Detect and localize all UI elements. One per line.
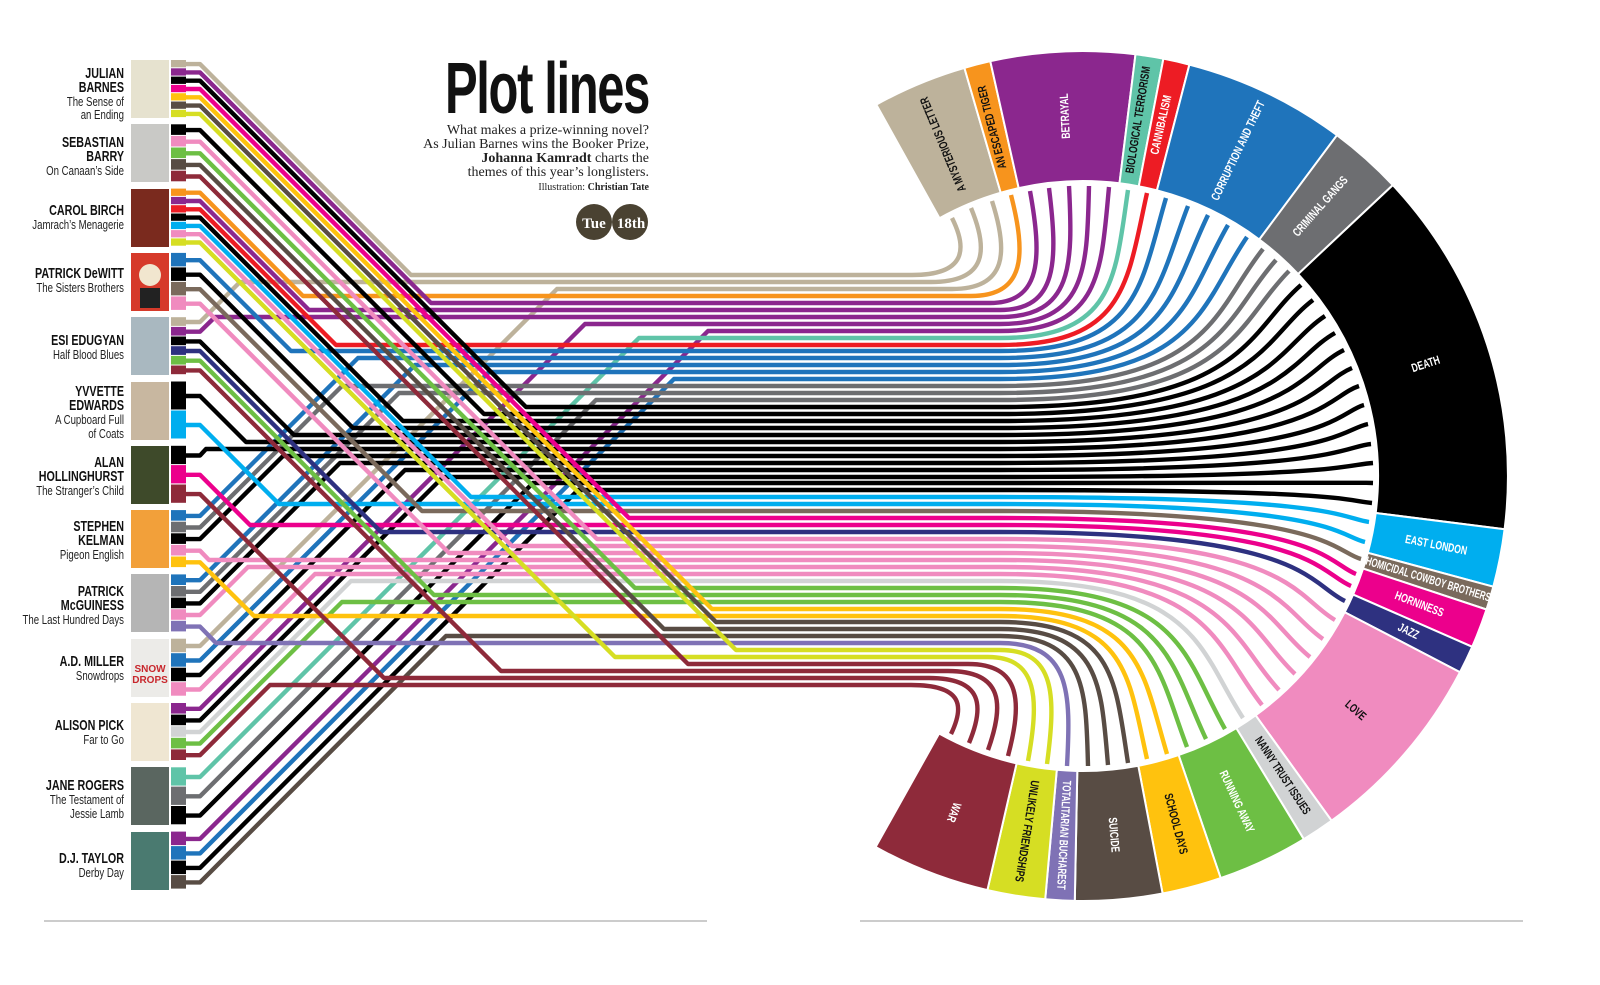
author: carol birch [32, 201, 124, 232]
lines: corruption and theft [186, 198, 1247, 853]
stubs: esi edugyan [171, 317, 186, 374]
sector: school days: SCHOOL DAYS [1161, 792, 1189, 856]
sector: an escaped tiger [964, 61, 1019, 193]
sector: biological terrorism: BIOLOGICAL TERRORISM [1124, 66, 1154, 174]
sector: nanny trust issues [1236, 715, 1332, 839]
stubs: patrick dewitt [171, 253, 186, 310]
sector: running away: RUNNING AWAY [1216, 769, 1256, 835]
stubs: a.d. miller [171, 639, 186, 696]
author: d.j. taylor: D.J. TAYLOR [59, 849, 124, 866]
author: sebastian barry [46, 133, 124, 178]
sector: cannibalism [1139, 59, 1189, 190]
date badge [576, 204, 648, 240]
author: d.j. taylor: Derby Day [79, 867, 124, 880]
author: yvvette edwards: of Coats [88, 428, 124, 441]
author: sebastian barry: SEBASTIAN [62, 133, 124, 150]
sector: betrayal: BETRAYAL [1059, 93, 1073, 139]
stubs: sebastian barry [171, 124, 186, 181]
subtitle: Illustration: Christian Tate [538, 182, 650, 193]
lines: death [186, 81, 1373, 868]
lines: homicidal cowboy brothers [186, 289, 1361, 559]
author: alison pick [55, 716, 125, 747]
title: Plot lines [445, 49, 649, 129]
author: patrick dewitt [35, 264, 124, 295]
stubs: jane rogers [171, 767, 186, 824]
author: esi edugyan [51, 331, 124, 362]
author: yvvette edwards: EDWARDS [69, 396, 124, 413]
author: julian barnes: BARNES [79, 78, 124, 95]
sector: death: DEATH [1410, 355, 1442, 375]
sector: suicide [1075, 766, 1163, 901]
author: a.d. miller: A.D. MILLER [60, 652, 124, 669]
lines: love [186, 142, 1335, 705]
lines: criminal gangs [186, 249, 1289, 796]
sector: betrayal [990, 51, 1136, 188]
lines: a mysterious letter [186, 64, 1001, 646]
lines: nanny trust issues [186, 581, 1243, 732]
author: jane rogers: Jessie Lamb [70, 808, 124, 821]
sector: cannibalism: CANNIBALISM [1149, 94, 1175, 156]
sector: totalitarian bucharest: TOTALITARIAN BUCHAREST [1054, 780, 1072, 890]
stubs: stephen kelman [171, 510, 186, 567]
author: stephen kelman: Pigeon English [60, 549, 124, 562]
subtitle: themes of this year’s longlisters. [468, 165, 649, 180]
sector: death [1298, 185, 1508, 529]
sector: running away [1179, 728, 1304, 878]
sector: a mysterious letter: A MYSTERIOUS LETTER [919, 94, 969, 193]
author: stephen kelman: KELMAN [78, 531, 124, 548]
sector: school days [1138, 755, 1221, 894]
sector: unlikely friendships: UNLIKELY FRIENDSHIPS [1012, 779, 1040, 883]
stubs: julian barnes [171, 60, 186, 117]
sector: east london: EAST LONDON [1404, 534, 1468, 558]
author: jane rogers: JANE ROGERS [46, 776, 124, 793]
subtitle: Johanna Kamradt charts the [481, 151, 649, 166]
author: julian barnes: an Ending [81, 109, 124, 122]
author: sebastian barry: On Canaan’s Side [46, 165, 124, 178]
author: yvvette edwards: YVVETTE [75, 382, 124, 399]
author: patrick mcguiness [23, 582, 125, 627]
author: julian barnes: The Sense of [67, 96, 125, 109]
lines: jazz [186, 351, 1345, 601]
sector: east london [1368, 513, 1505, 587]
stubs: patrick mcguiness [171, 574, 186, 631]
author: patrick mcguiness: The Last Hundred Days [23, 614, 124, 627]
sector: love: LOVE [1342, 699, 1368, 723]
author: esi edugyan: ESI EDUGYAN [51, 331, 124, 348]
book covers: SNOW [134, 664, 166, 675]
date badge: 18th [617, 216, 646, 232]
author: julian barnes: JULIAN [85, 64, 124, 81]
author: jane rogers [46, 776, 125, 821]
book covers [131, 60, 169, 890]
author: stephen kelman [60, 517, 124, 562]
author: patrick dewitt: PATRICK DeWITT [35, 264, 124, 281]
sector: war: WAR [943, 800, 963, 824]
author: stephen kelman: STEPHEN [73, 517, 124, 534]
lines: totalitarian bucharest [186, 627, 1068, 766]
author: yvvette edwards: A Cupboard Full [55, 414, 124, 427]
lines: suicide [186, 106, 1128, 882]
subtitle: What makes a prize-winning novel? [447, 123, 649, 138]
subtitle [423, 123, 650, 193]
author: carol birch: Jamrach’s Menagerie [32, 219, 124, 232]
sector: criminal gangs: CRIMINAL GANGS [1291, 174, 1351, 240]
sector: homicidal cowboy brothers: HOMICIDAL COWBOY BROTHERS [1364, 555, 1492, 605]
author: carol birch: CAROL BIRCH [49, 201, 124, 218]
sector: a mysterious letter [876, 68, 1001, 218]
author: a.d. miller [60, 652, 124, 683]
sector: horniness [1353, 569, 1486, 647]
theme arc [876, 51, 1508, 901]
author: jane rogers: The Testament of [50, 794, 125, 807]
sector: criminal gangs [1259, 135, 1393, 274]
sector: jazz: JAZZ [1396, 622, 1421, 643]
author: julian barnes [67, 64, 125, 122]
book covers: DROPS [132, 675, 168, 686]
author: patrick dewitt: The Sisters Brothers [36, 282, 124, 295]
stubs: alison pick [171, 703, 186, 760]
plot lines [186, 64, 1373, 882]
lines: betrayal [186, 72, 1109, 839]
sector: biological terrorism [1120, 54, 1163, 186]
sector: an escaped tiger: AN ESCAPED TIGER [976, 84, 1010, 170]
sector: horniness: HORNINESS [1393, 590, 1445, 620]
author: a.d. miller: Snowdrops [76, 670, 124, 683]
author: alan hollinghurst: HOLLINGHURST [39, 467, 124, 484]
author: sebastian barry: BARRY [86, 147, 124, 164]
lines: biological terrorism [186, 190, 1128, 777]
author: alan hollinghurst [36, 453, 124, 498]
lines: running away [186, 153, 1225, 747]
author labels [23, 64, 125, 880]
sector: suicide: SUICIDE [1105, 817, 1121, 853]
author: esi edugyan: Half Blood Blues [53, 349, 124, 362]
sector: corruption and theft: CORRUPTION AND THEFT [1210, 99, 1268, 203]
lines: horniness [186, 89, 1356, 586]
lines: school days [186, 97, 1167, 759]
theme stubs [171, 60, 186, 889]
stubs: yvvette edwards [171, 382, 186, 438]
author: alison pick: ALISON PICK [55, 716, 125, 733]
sector: totalitarian bucharest [1045, 770, 1077, 901]
subtitle: As Julian Barnes wins the Booker Prize, [423, 137, 649, 152]
author: alan hollinghurst: ALAN [94, 453, 124, 470]
author: yvvette edwards [55, 382, 124, 441]
stubs: alan hollinghurst [171, 446, 186, 503]
author: patrick mcguiness: PATRICK [78, 582, 125, 599]
lines: cannibalism [186, 193, 1147, 345]
author: alison pick: Far to Go [83, 734, 124, 747]
author: alan hollinghurst: The Stranger’s Child [36, 485, 124, 498]
stubs: d.j. taylor [171, 832, 186, 889]
author: patrick mcguiness: McGUINESS [61, 596, 124, 613]
lines: war [186, 176, 1016, 756]
sector: war [876, 734, 1017, 890]
lines: east london [186, 226, 1369, 542]
sector: nanny trust issues: NANNY TRUST ISSUES [1252, 735, 1312, 817]
lines: an escaped tiger [186, 193, 1020, 296]
sector: jazz [1345, 595, 1472, 672]
sector: unlikely friendships [987, 763, 1057, 899]
sector: love [1256, 612, 1460, 821]
stubs: carol birch [171, 189, 186, 246]
date badge: Tue [582, 216, 606, 232]
lines: unlikely friendships [186, 114, 1051, 764]
sector: corruption and theft [1157, 65, 1337, 239]
author: d.j. taylor [59, 849, 124, 880]
